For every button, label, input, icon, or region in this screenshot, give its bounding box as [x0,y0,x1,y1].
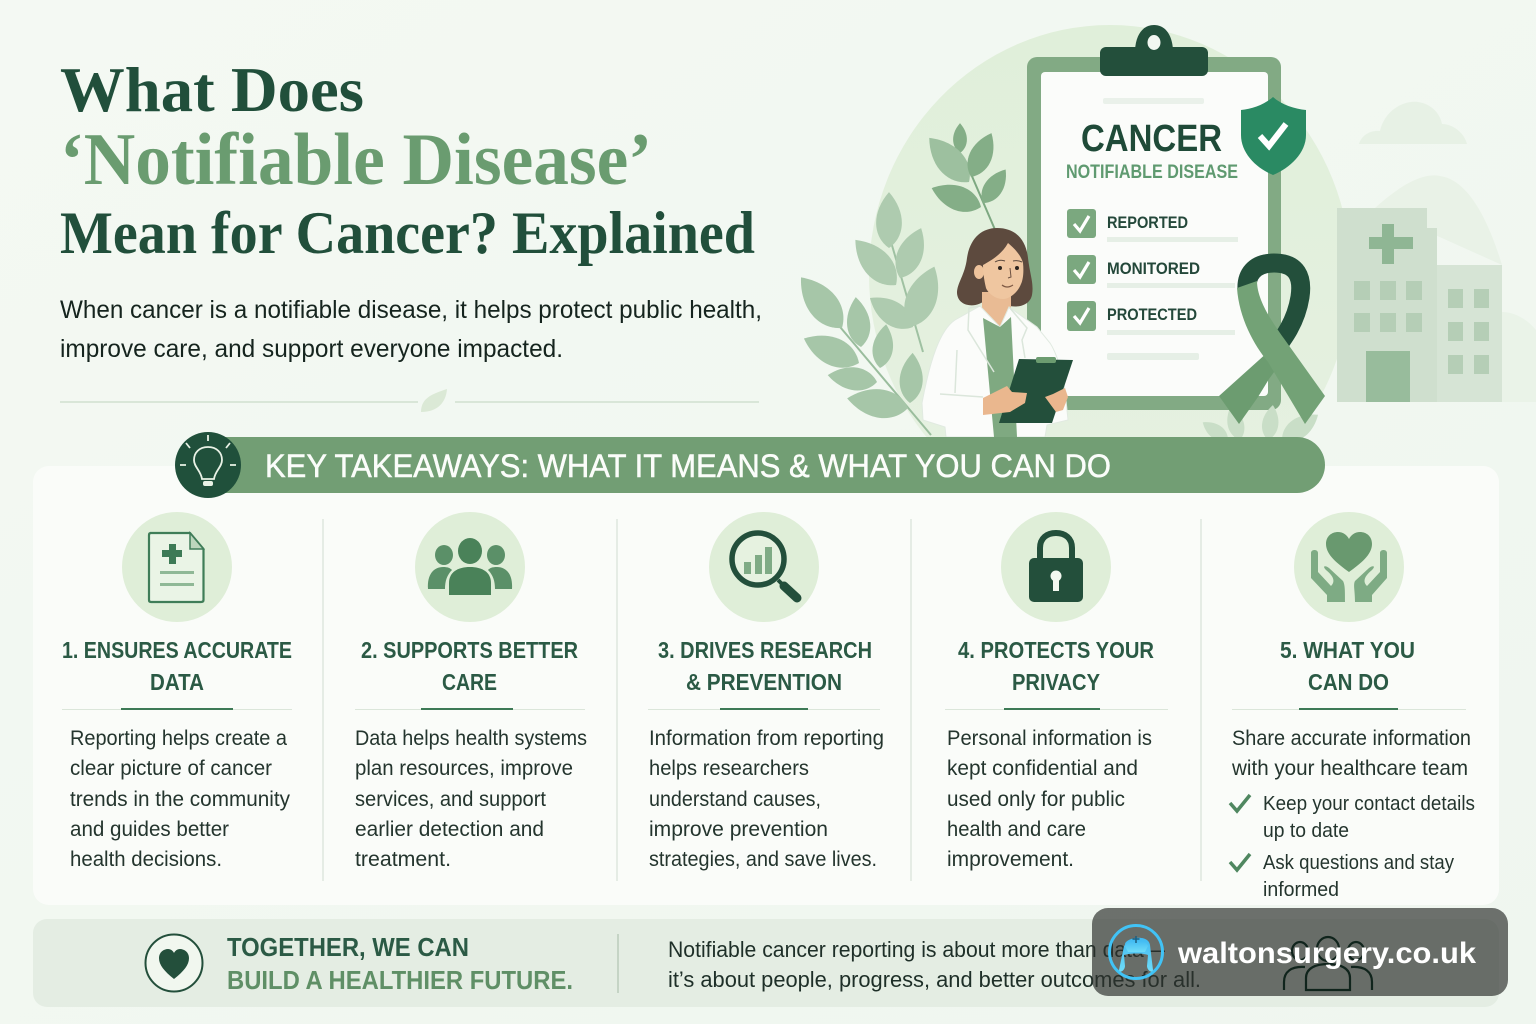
coat [922,306,1068,437]
icon: people [415,512,525,622]
small clipboard [999,359,1073,423]
message text [668,937,1201,992]
icon: shield [1241,97,1306,175]
underline [62,708,292,710]
body text: trends in the community [70,788,290,811]
heading: protects your privacy: PRIVACY [1012,669,1100,695]
heading: drives research and prevention: & PREVENTION [686,669,842,695]
checklist item: reported: REPORTED [1107,213,1188,232]
illustration: hospital [1337,175,1536,402]
illustration: clipboard: CANCER [1081,118,1222,160]
checklist item: reported [1067,209,1238,242]
body text: with your healthcare team [1231,757,1468,780]
banner: KEY TAKEAWAYS: WHAT IT MEANS & WHAT YOU CAN DO [265,448,1111,484]
icon: lightbulb [175,432,241,498]
body text: Reporting helps create a [70,727,287,750]
body text: Personal information is [947,727,1152,750]
column dividers [322,519,1202,881]
body text [649,727,884,871]
panel: column 5 [1230,512,1475,901]
banner [208,437,1325,493]
icon: nurse logo [1110,926,1162,978]
illustration: clipboard: NOTIFIABLE DISEASE [1066,162,1238,183]
body text: improvement. [947,848,1074,871]
checklist item: monitored: MONITORED [1107,259,1200,278]
icon: magnifier [709,512,819,622]
hair [957,228,1033,307]
heading: drives research and prevention [658,637,872,695]
title: What Does [60,54,364,125]
checklist item: protected [1067,301,1235,335]
body text [70,727,290,871]
body text: helps researchers [649,757,809,780]
body text: understand causes, [649,788,821,811]
underline [355,708,585,710]
body text: kept confidential and [947,757,1138,780]
heading: together: TOGETHER, WE CAN [227,932,469,962]
body text: and guides better [70,818,229,841]
bullet: ask questions [1230,852,1454,901]
heading: ensures accurate data: DATA [150,669,204,695]
icon: awareness ribbon [1219,263,1325,424]
intro text: improve care, and support everyone impacted. [60,335,563,363]
underline [648,708,880,710]
heading: ensures accurate data: 1. ENSURES ACCURATE [62,637,292,663]
heading: ensures accurate data [62,637,292,695]
bullet: keep contact details: up to date [1263,820,1349,842]
heading: supports better care: CARE [442,669,497,695]
illustration: leaf branch lower [789,268,931,435]
panel: key takeaways card [33,466,1499,905]
body text: treatment. [355,848,451,871]
illustration: doctor [922,228,1073,437]
watermark text: waltonsurgery.co.uk [1177,937,1476,970]
body text: health and care [947,818,1086,841]
heading: protects your privacy: 4. PROTECTS YOUR [958,637,1154,663]
body text [947,727,1152,871]
icon: padlock [1001,512,1111,622]
intro text: When cancer is a notifiable disease, it helps protect public health, [60,296,762,324]
bullet: keep contact details [1230,793,1475,842]
leaf divider [60,389,759,412]
icon: medical document [122,512,232,622]
message text: it’s about people, progress, and better outcomes for all. [668,967,1201,992]
illustration: background halo [869,25,1351,525]
title: Mean for Cancer? Explained [60,200,755,266]
body text: Data helps health systems [355,727,587,750]
body text: health decisions. [70,848,222,871]
message text: Notifiable cancer reporting is about more than data— [668,937,1165,962]
bullet: keep contact details: Keep your contact details [1263,793,1475,815]
hands [983,386,1027,415]
icon: people outline [1284,937,1372,990]
body text: used only for public [947,788,1125,811]
title [60,54,755,266]
heading: protects your privacy [958,637,1154,695]
checklist item: protected: PROTECTED [1107,305,1197,324]
bullet: ask questions: Ask questions and stay [1263,852,1454,874]
face [974,243,1023,299]
body text: earlier detection and [355,818,544,841]
underline [945,708,1168,710]
heading: what you can do [1280,637,1415,695]
bullet: ask questions: informed [1263,879,1339,901]
body text [355,727,587,871]
icon: heart in circle [146,934,202,992]
title: ‘Notifiable Disease’ [60,119,652,201]
body text: strategies, and save lives. [649,848,877,871]
heading: what you can do: 5. WHAT YOU [1280,637,1415,663]
body text: Information from reporting [649,727,884,750]
panel: column 3 [648,512,884,871]
panel: column 1 [62,512,292,871]
scrubs [983,317,1017,437]
heading: supports better care: 2. SUPPORTS BETTER [361,637,578,663]
icon: hands holding heart [1294,512,1404,622]
panel: bottom message bar [33,919,1499,1007]
neck [982,292,1011,328]
heading: together: BUILD A HEALTHIER FUTURE. [227,965,573,995]
heading: together [227,932,573,995]
intro text [60,296,762,363]
panel: column 2 [355,512,587,871]
heading: what you can do: CAN DO [1308,669,1389,695]
body text: plan resources, improve [355,757,573,780]
watermark badge [1092,908,1508,996]
body text: improve prevention [649,818,828,841]
heading: drives research and prevention: 3. DRIVES RESEARCH [658,637,872,663]
panel: column 4 [945,512,1168,871]
body text: clear picture of cancer [70,757,272,780]
illustration: leaf branch middle [845,192,948,352]
underline [1232,708,1466,710]
body text [1231,727,1471,780]
illustration: leaf branch top [919,123,1013,232]
body text: services, and support [355,788,546,811]
heading: supports better care [361,637,578,695]
illustration: clipboard [1027,25,1281,410]
illustration: plants below ribbon [1199,404,1324,448]
checklist item: monitored [1067,255,1235,288]
body text: Share accurate information [1232,727,1471,750]
illustration: cloud [1359,102,1467,144]
